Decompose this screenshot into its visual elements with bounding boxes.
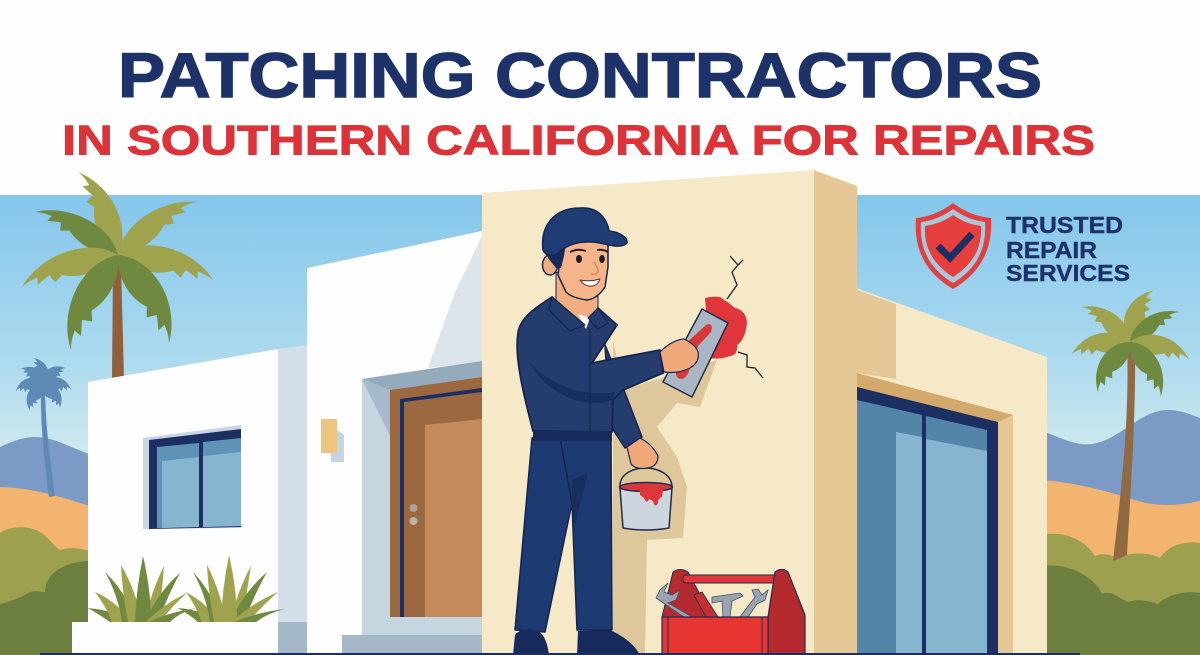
shield icon — [916, 203, 991, 289]
right light bush — [1040, 534, 1200, 655]
toolbox handle — [683, 575, 778, 583]
wall crack lower — [738, 352, 763, 378]
eyes and brows — [570, 250, 608, 263]
door step — [342, 635, 482, 655]
sky — [0, 195, 1200, 495]
jacket fold shadow — [529, 362, 615, 403]
worker shadow on wall — [613, 340, 717, 653]
wall shadow wedge — [428, 236, 482, 368]
badge text: TRUSTED — [1006, 212, 1123, 238]
wall crack upper — [727, 256, 743, 299]
low wing front wall — [88, 349, 278, 655]
agave plants — [88, 555, 285, 622]
planter base — [72, 622, 278, 655]
toolbox trim — [668, 617, 762, 655]
title line 2: IN SOUTHERN CALIFORNIA FOR REPAIRS — [62, 116, 1095, 164]
hammer — [712, 593, 743, 617]
red tool handle — [694, 592, 718, 617]
tall white wall — [307, 231, 482, 655]
hanging sleeve — [605, 345, 642, 448]
hand — [660, 339, 698, 372]
cap — [543, 208, 627, 255]
right palm tree — [1068, 284, 1194, 561]
paint drips — [640, 490, 663, 506]
right sand dune — [1040, 480, 1200, 600]
right landscape — [1040, 284, 1200, 655]
red patching compound — [705, 297, 747, 359]
hand with trowel — [660, 309, 728, 397]
jacket collar — [549, 297, 608, 331]
paint bucket — [620, 438, 672, 530]
nose — [591, 262, 598, 274]
right dark bush — [1040, 565, 1200, 655]
bucket body — [620, 488, 672, 530]
left leg — [515, 438, 572, 632]
badge text: SERVICES — [1006, 260, 1130, 286]
back gable left — [662, 570, 712, 617]
left dark bush — [0, 561, 95, 655]
title line 1: PATCHING CONTRACTORS — [118, 41, 1042, 111]
low wing side wall — [278, 345, 307, 655]
bucket rim — [620, 482, 672, 492]
tall front wall — [482, 170, 814, 655]
side window — [143, 425, 241, 529]
left sand dune — [0, 487, 95, 600]
large left palm tree — [15, 164, 219, 378]
block side wall — [814, 170, 896, 655]
small distant palm — [13, 354, 73, 497]
ear — [542, 255, 558, 275]
right hills — [1040, 410, 1200, 520]
badge text: REPAIR — [1006, 237, 1097, 263]
smile — [580, 279, 600, 286]
toolbox — [656, 570, 805, 655]
bucket handle — [620, 468, 672, 486]
white undershirt — [578, 314, 590, 329]
wrench right — [740, 589, 768, 617]
bottom edge line — [40, 653, 1080, 655]
title — [62, 41, 1095, 164]
trusted badge — [916, 203, 1130, 289]
trouser crease shade — [572, 473, 588, 525]
face — [558, 238, 608, 300]
planter shadow — [278, 622, 307, 655]
toolbox front — [662, 617, 768, 655]
hair — [546, 243, 566, 268]
neck — [556, 272, 598, 325]
wrench left — [656, 583, 692, 617]
jacket torso and arm — [517, 297, 663, 432]
header background — [0, 0, 1200, 195]
belt — [533, 431, 612, 441]
left light bush — [0, 527, 95, 655]
cream stucco building — [482, 170, 1047, 655]
jacket center seam — [589, 329, 591, 432]
front door — [390, 377, 482, 617]
sliding glass door — [857, 373, 1013, 655]
left landscape — [0, 164, 219, 655]
right leg — [560, 438, 612, 630]
left hills — [0, 437, 95, 520]
door recess — [342, 361, 482, 655]
worker — [513, 208, 728, 655]
toolbox side gable — [768, 570, 805, 655]
shoes — [513, 630, 640, 655]
white house — [72, 231, 482, 655]
trowel handle — [676, 324, 712, 379]
right wing front wall — [856, 288, 1047, 655]
badge text — [1006, 212, 1130, 286]
hand holding bucket — [627, 438, 658, 468]
wall lamp — [321, 419, 344, 462]
trowel blade — [663, 309, 728, 397]
